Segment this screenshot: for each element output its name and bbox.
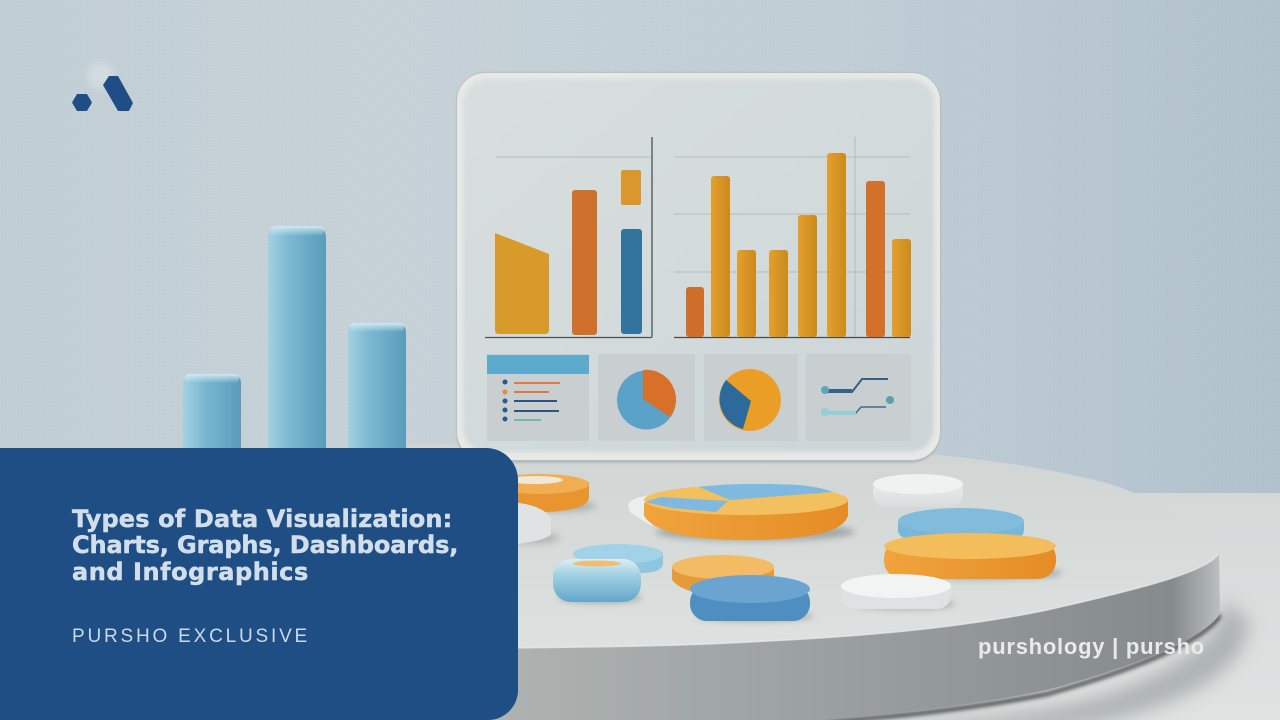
pale cyan disc	[553, 559, 642, 603]
title	[72, 504, 458, 586]
tile: pie one	[598, 354, 695, 441]
title: Types of Data Visualization:	[72, 504, 452, 532]
white disc lower	[841, 574, 955, 609]
title: and Infographics	[72, 558, 309, 586]
table pieces	[491, 474, 1062, 621]
tile: list	[487, 354, 589, 441]
orange disc behind panel	[491, 474, 596, 512]
round table platform	[400, 443, 1248, 720]
right bar chart	[674, 137, 911, 338]
white disc left	[500, 502, 560, 546]
pale blue disc	[573, 544, 663, 573]
title panel	[0, 448, 518, 720]
left bar chart	[485, 137, 652, 338]
tile: flow connector	[806, 354, 911, 441]
title: Charts, Graphs, Dashboards,	[72, 531, 458, 559]
large pie	[628, 484, 855, 541]
blue disc right	[898, 508, 1024, 538]
blue disc front	[690, 575, 813, 621]
white disc top right	[873, 474, 963, 507]
subtitle: PURSHO EXCLUSIVE	[72, 626, 310, 647]
orange disc small	[672, 555, 774, 593]
brand text: purshology | pursho	[978, 634, 1205, 659]
orange disc right	[884, 533, 1062, 579]
icon: logo	[72, 62, 133, 111]
dashboard board	[456, 72, 941, 463]
3D blue cylinders	[183, 226, 406, 466]
tile: pie two	[704, 354, 798, 441]
